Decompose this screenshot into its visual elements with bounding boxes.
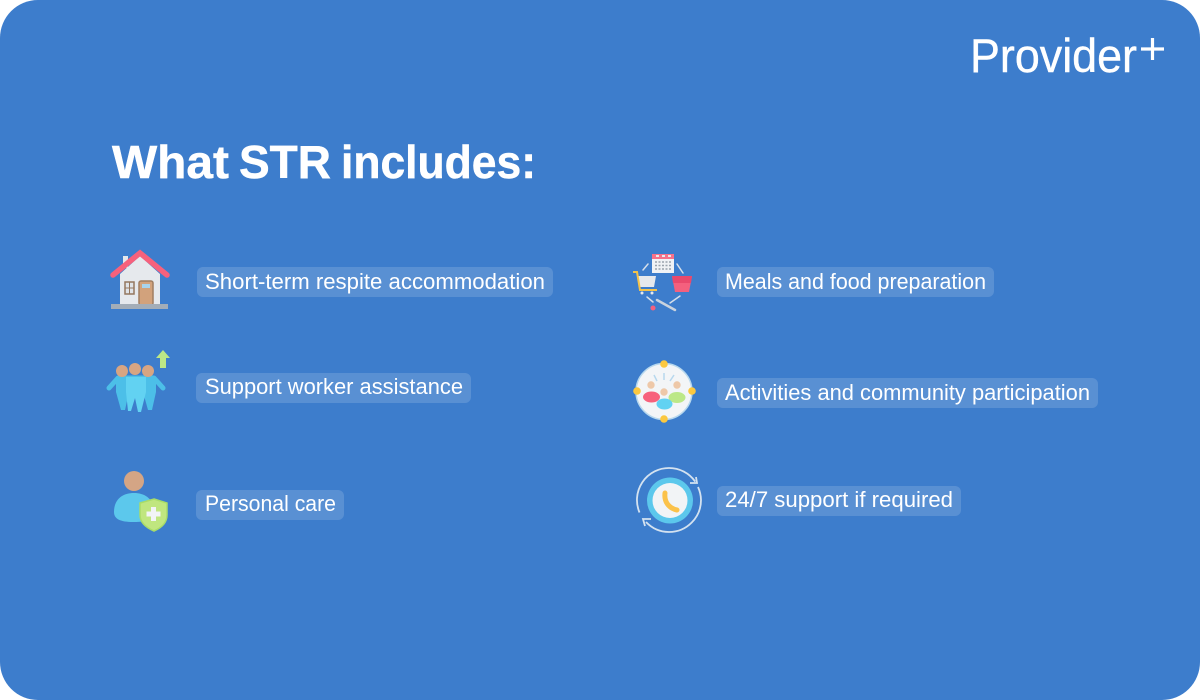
icon: meal planning cycle (633, 254, 692, 310)
label text: Meals and food preparation (725, 269, 986, 294)
title: STR (239, 136, 331, 188)
label pill (196, 373, 471, 403)
item: 24/7 support (637, 468, 961, 532)
icon: team with up arrow (109, 350, 170, 412)
icon: person with shield (114, 471, 167, 531)
item: support worker assistance (109, 350, 471, 412)
label text: Personal care (205, 491, 336, 516)
label text: Support worker assistance (205, 374, 463, 399)
title: includes: (341, 136, 536, 188)
item: short-term respite accommodation (111, 253, 553, 309)
label pill (717, 378, 1098, 408)
label text: Short-term respite accommodation (205, 269, 545, 294)
title (112, 136, 536, 188)
label pill (196, 490, 344, 520)
item: personal care (114, 471, 344, 531)
icon: community circle (633, 360, 696, 423)
label pill (717, 267, 994, 297)
label pill (197, 267, 553, 297)
item: activities and community participation (633, 360, 1098, 423)
label text: Activities and community participation (725, 380, 1090, 405)
label pill (717, 486, 961, 516)
icon: house (111, 253, 168, 309)
icon: clock with phone (637, 468, 701, 532)
logo: Provider+: Provider (970, 29, 1137, 82)
title: What (112, 136, 229, 188)
label text: 24/7 support if required (725, 487, 953, 512)
item: meals and food preparation (633, 254, 994, 310)
